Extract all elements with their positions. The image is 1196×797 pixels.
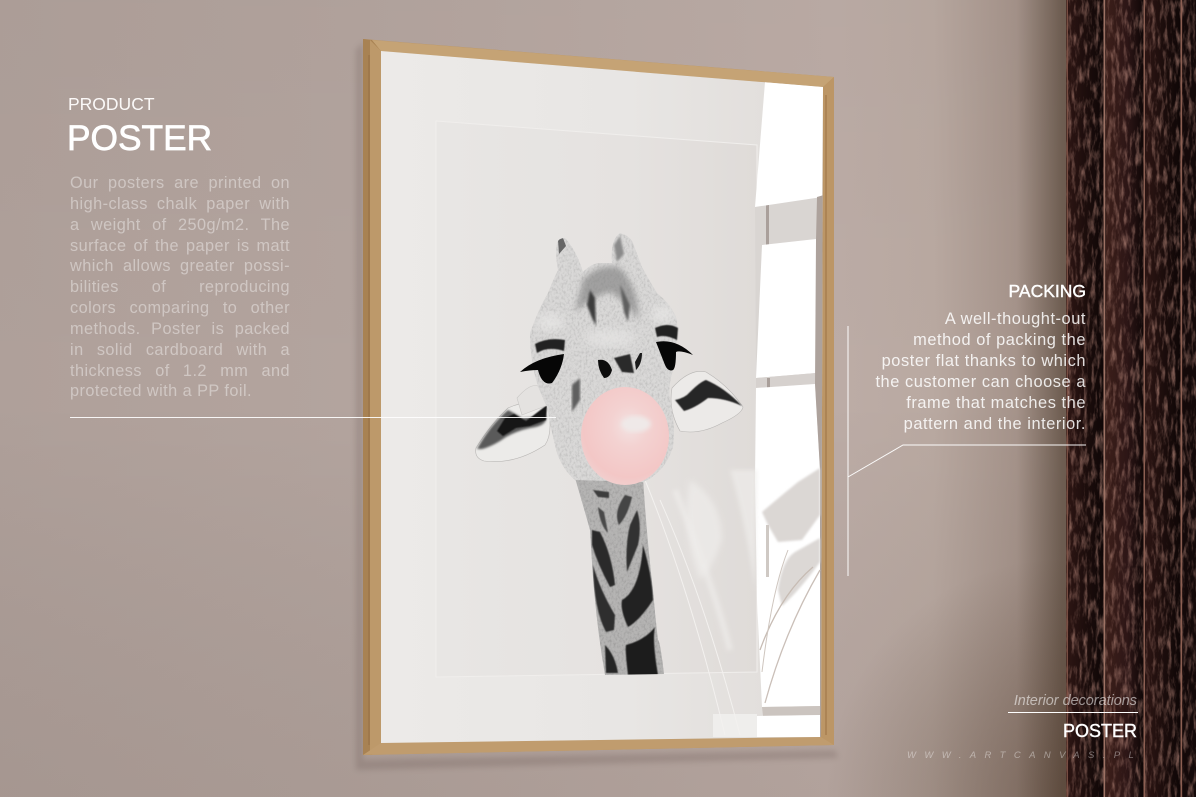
- eyes and lashes: [520, 325, 693, 383]
- inner print area: [436, 121, 757, 677]
- callout line: product to giraffe: [70, 416, 556, 418]
- description text block: bilities of reproducing: [70, 278, 290, 296]
- nostrils: [598, 353, 642, 378]
- description text block: which allows greater possi-: [70, 257, 290, 275]
- white mat board: [381, 51, 823, 743]
- wooden frame: [363, 39, 834, 755]
- neck: [576, 480, 664, 675]
- packing text block: [875, 310, 1086, 433]
- heading: packing: PACKING: [1009, 281, 1086, 301]
- giraffe illustration: [476, 230, 743, 680]
- frame shadow: [356, 42, 838, 770]
- right ear: [671, 371, 743, 432]
- head: [520, 230, 693, 485]
- footer: website: WWW.ARTCANVAS.PL: [907, 750, 1142, 761]
- left ear: [476, 386, 550, 462]
- description text block: surface of the paper is matt: [70, 237, 290, 255]
- callout line: packing bracket: [848, 326, 1086, 576]
- description text block: colors comparing to other: [70, 299, 290, 317]
- packing text block: pattern and the interior.: [904, 415, 1086, 433]
- reflection: pampas grass shadow: [645, 468, 820, 735]
- description text block: protected with a PP foil.: [70, 382, 252, 400]
- footer: interior decorations: Interior decorations: [1014, 693, 1137, 709]
- description text block: a weight of 250g/m2. The: [70, 216, 290, 234]
- description text block: methods. Poster is packed: [70, 320, 290, 338]
- description text block: [70, 174, 290, 400]
- description text block: in solid cardboard with a: [70, 341, 290, 359]
- description text block: high-class chalk paper with: [70, 195, 290, 213]
- packing text block: frame that matches the: [906, 394, 1086, 412]
- packing text block: poster flat thanks to which: [882, 352, 1086, 370]
- packing text block: the customer can choose a: [875, 373, 1086, 391]
- packing text block: A well-thought-out: [945, 310, 1086, 328]
- footer divider: [1008, 712, 1138, 714]
- glass reflection: window: [645, 82, 824, 737]
- eyebrow: product: PRODUCT: [68, 94, 155, 114]
- footer: poster label: POSTER: [1063, 721, 1137, 741]
- title: poster: POSTER: [67, 119, 212, 158]
- curtain: [1066, 0, 1196, 797]
- bubble gum: [581, 387, 669, 485]
- description text block: Our posters are printed on: [70, 174, 290, 192]
- description text block: thickness of 1.2 mm and: [70, 362, 290, 380]
- packing text block: method of packing the: [913, 331, 1086, 349]
